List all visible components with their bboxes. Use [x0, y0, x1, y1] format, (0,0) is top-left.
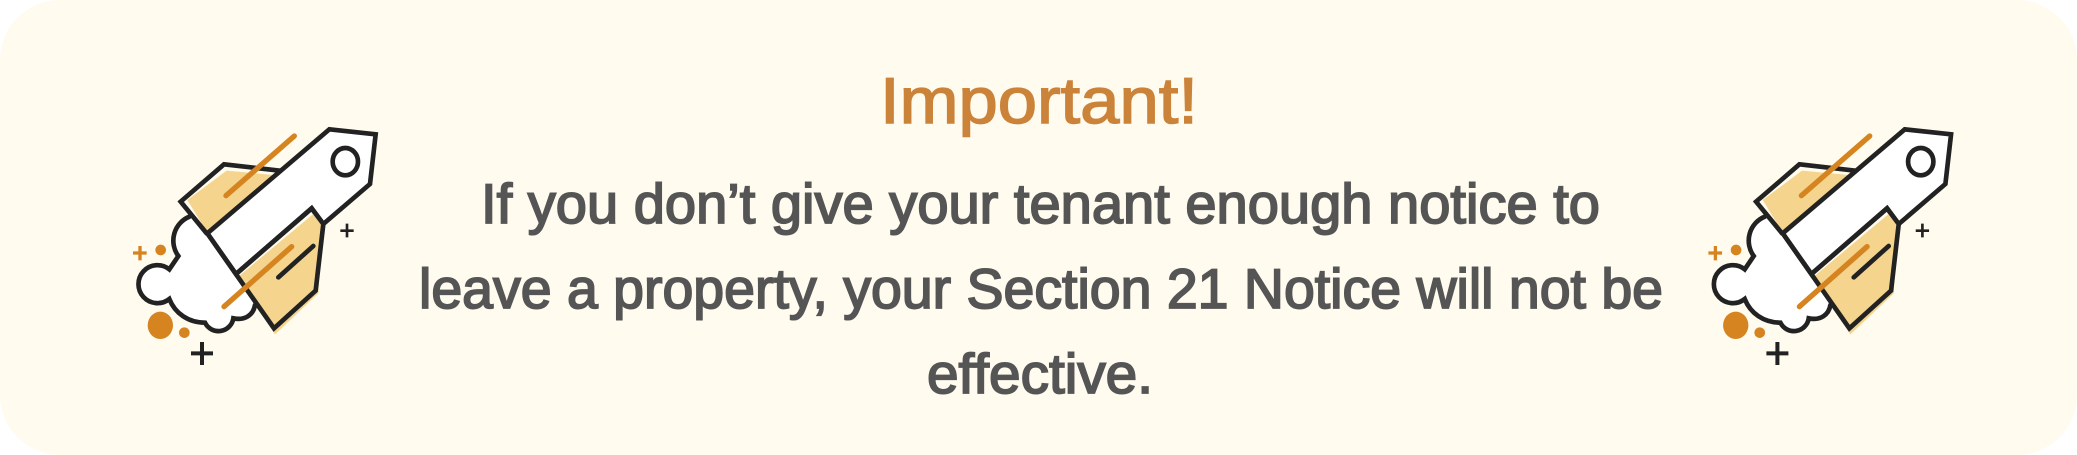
icon: left rocket — [133, 129, 376, 365]
body text — [419, 172, 1663, 405]
body text: leave a property, your Section 21 Notice will not be — [419, 257, 1663, 320]
heading: Important! — [880, 64, 1198, 137]
icon: right rocket — [1708, 129, 1951, 365]
body text: effective. — [927, 342, 1153, 405]
body text: If you don’t give your tenant enough notice to — [481, 172, 1600, 235]
